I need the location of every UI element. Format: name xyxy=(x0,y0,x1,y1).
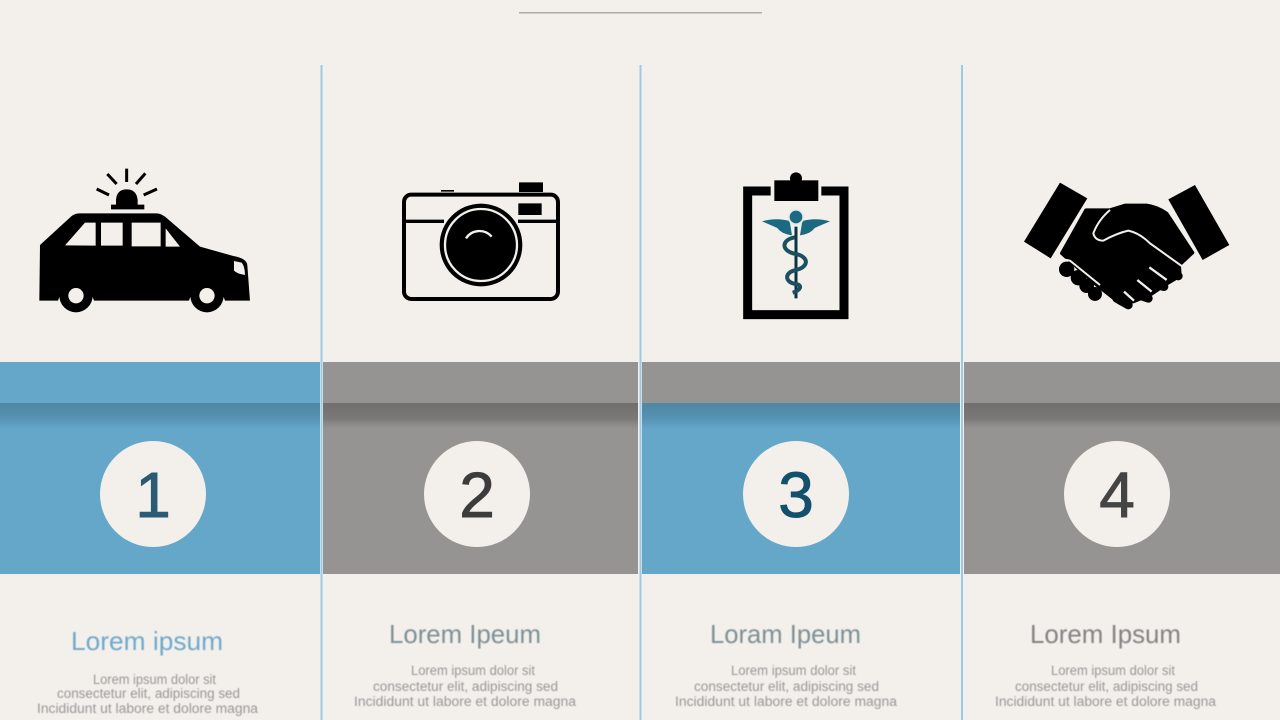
text block: column 4: Incididunt ut labore et dolore magna xyxy=(995,694,1216,709)
text block: column 3: Incididunt ut labore et dolore magna xyxy=(675,694,897,709)
panel: band 4 xyxy=(964,362,1280,574)
panel: band 1 xyxy=(0,362,320,574)
text block: column 2: Lorem Ipeum xyxy=(389,619,541,649)
icon: medical clipboard xyxy=(748,172,844,315)
icon: camera xyxy=(404,182,558,299)
number badge 3: 3 xyxy=(778,459,814,531)
number badge 1 xyxy=(100,441,206,547)
text block: column 1: Lorem ipsum dolor sit xyxy=(93,672,216,687)
text block: column 1: consectetur elit, adipiscing sed xyxy=(57,686,240,701)
text block: column 4: Lorem ipsum dolor sit xyxy=(1051,663,1175,678)
text block: column 2: Incididunt ut labore et dolore magna xyxy=(354,694,576,709)
text block: column 1 xyxy=(37,626,258,716)
number badge 3 xyxy=(743,441,849,547)
number badge 4 xyxy=(1064,441,1170,547)
number badge 2 xyxy=(424,441,530,547)
icon: handshake xyxy=(1024,183,1229,305)
text block: column 1: Incididunt ut labore et dolore magna xyxy=(37,701,258,716)
text block: column 3: Loram Ipeum xyxy=(710,619,861,649)
text block: column 2 xyxy=(354,619,576,709)
number badge 2: 2 xyxy=(459,459,495,531)
number badge 4: 4 xyxy=(1099,459,1135,531)
number badge 1: 1 xyxy=(135,459,171,531)
text block: column 3: consectetur elit, adipiscing sed xyxy=(694,679,879,694)
text block: column 2: Lorem ipsum dolor sit xyxy=(411,663,535,678)
icon: police car xyxy=(39,169,250,312)
panel: band 2 xyxy=(323,362,638,574)
text block: column 2: consectetur elit, adipiscing sed xyxy=(373,679,558,694)
text block: column 3 xyxy=(675,619,897,709)
panel: band 3 xyxy=(642,362,960,574)
text block: column 4 xyxy=(995,619,1216,709)
text block: column 4: consectetur elit, adipiscing sed xyxy=(1015,679,1198,694)
text block: column 1: Lorem ipsum xyxy=(71,626,223,656)
text block: column 3: Lorem ipsum dolor sit xyxy=(731,663,856,678)
text block: column 4: Lorem Ipsum xyxy=(1030,619,1181,649)
